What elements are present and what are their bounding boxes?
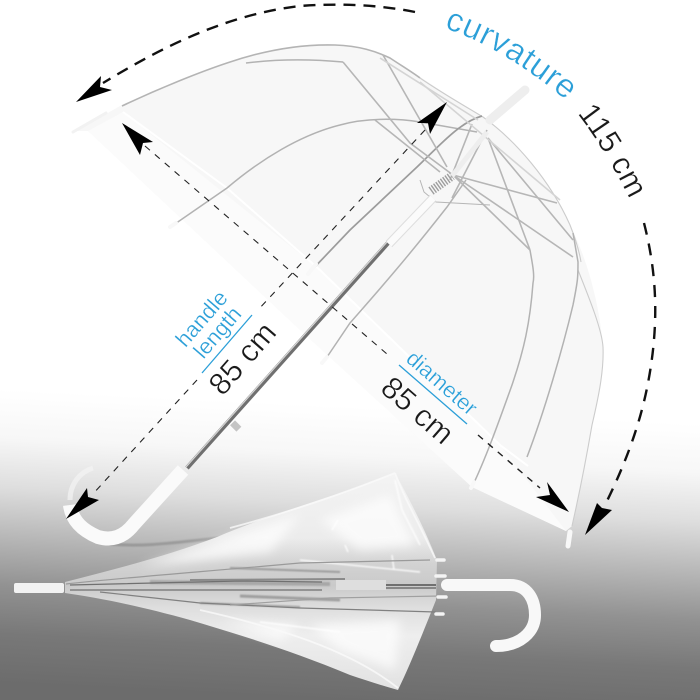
rim highlight (123, 112, 528, 466)
runner sleeve (389, 198, 433, 244)
closed runner (336, 580, 386, 590)
closed ferrule (14, 583, 64, 593)
label: handle length: handle (170, 285, 233, 352)
open umbrella (70, 45, 603, 546)
closed canopy (65, 473, 437, 690)
arrowhead: lower (66, 488, 99, 519)
closed sheen (140, 495, 415, 670)
arrowhead (585, 503, 612, 535)
closed ribs (66, 560, 440, 612)
spring (431, 176, 452, 191)
hook handle (70, 470, 183, 538)
label: handle length (170, 285, 248, 365)
arrow: curvature right (585, 223, 655, 535)
label: diameter 85 cm: 85 cm (374, 369, 461, 451)
closed umbrella (14, 473, 535, 690)
arrowhead: upper (122, 123, 153, 155)
upper shaft (452, 132, 487, 176)
shaft (187, 243, 388, 468)
label: diameter: diameter (401, 345, 482, 420)
hook tip (70, 468, 93, 500)
closed folds (200, 473, 435, 688)
arrow: diameter (122, 123, 569, 512)
closed rib tips (436, 560, 446, 614)
arrowhead (76, 76, 112, 102)
arrow: curvature top (76, 5, 415, 102)
underline: diameter (399, 365, 467, 424)
canopy rim band (88, 112, 566, 531)
canopy (76, 45, 603, 531)
ribs (172, 60, 578, 487)
label: curvature: curvature (447, 14, 574, 98)
arrow: handle length (66, 102, 447, 519)
struts (343, 55, 573, 257)
left rim tip (73, 113, 106, 132)
canopy right edge (420, 78, 603, 526)
closed hook handle (447, 585, 535, 646)
handle shadow (110, 535, 250, 545)
closed dark streaks (150, 568, 340, 607)
label: 115 cm: 115 cm (578, 105, 642, 198)
label: handle length: length (188, 302, 246, 363)
arrowhead: upper (417, 102, 447, 134)
top ferrule (490, 90, 525, 120)
underline: handle length (202, 315, 252, 373)
arrowhead: lower (536, 482, 569, 512)
canopy top edge (122, 45, 420, 106)
catch (230, 420, 241, 432)
rib tips (170, 223, 570, 546)
label: handle 85 cm: 85 cm (201, 315, 283, 402)
closed crinkle highlights (260, 480, 420, 632)
